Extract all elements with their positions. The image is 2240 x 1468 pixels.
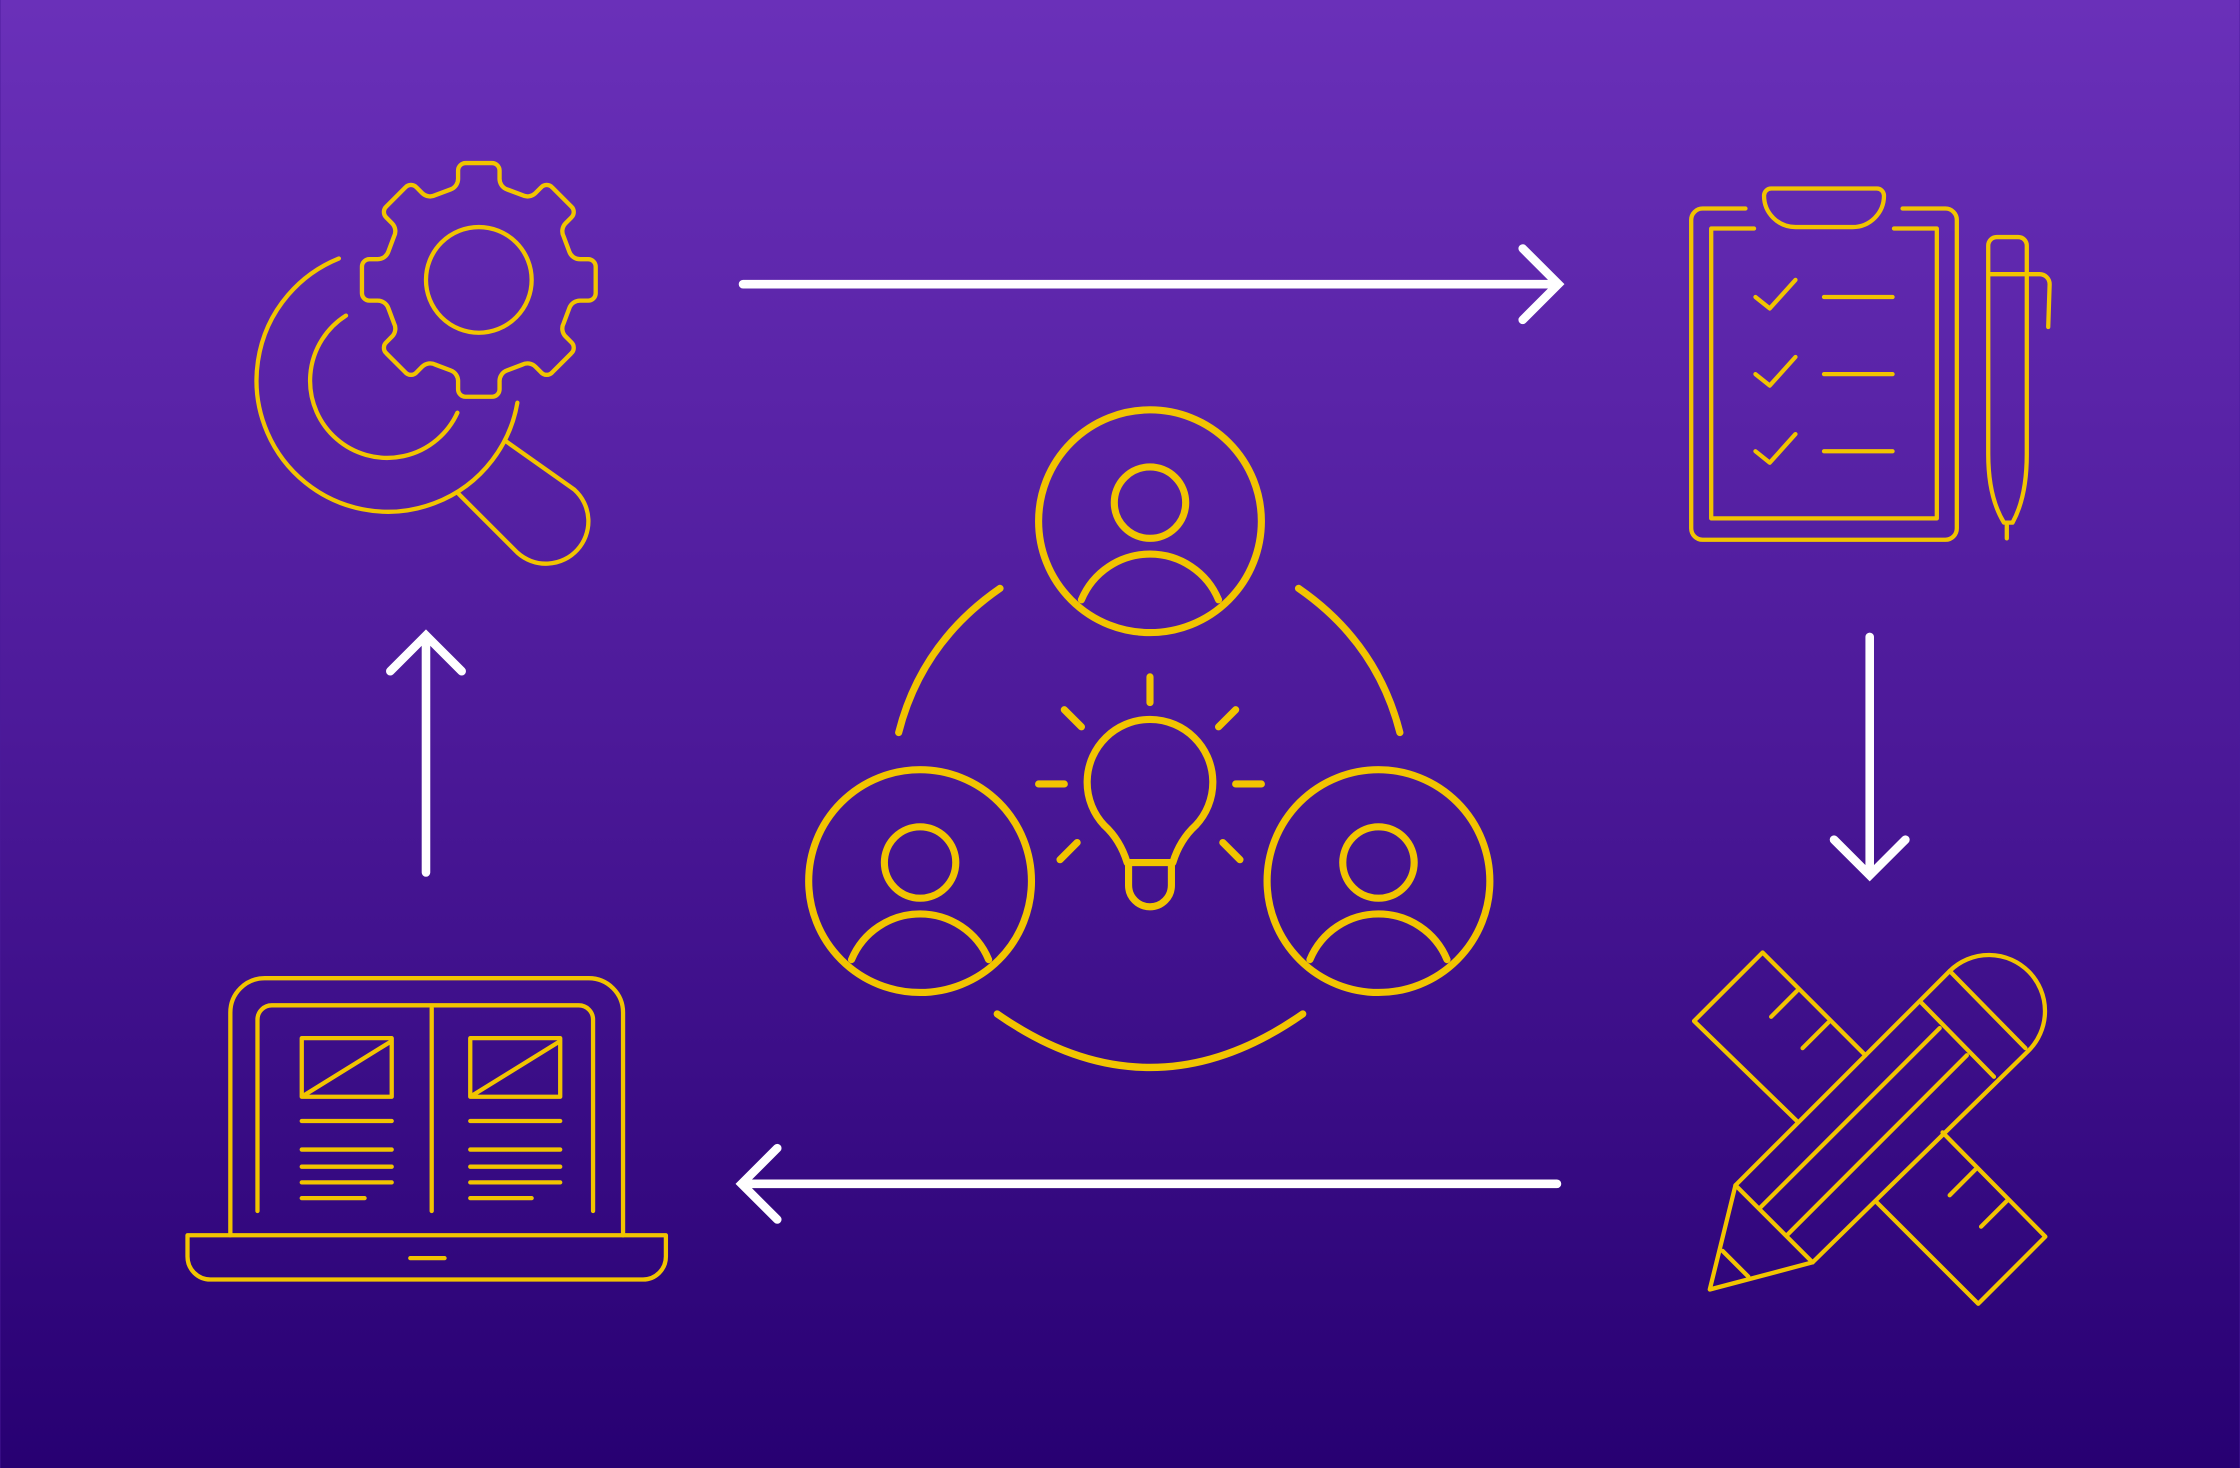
arrow: bottom left [742,1148,1557,1220]
person top [1039,410,1261,633]
center: team collaboration idea [809,410,1490,1067]
person left [809,770,1031,992]
icon: pencil and ruler [1694,952,2045,1304]
icon: clipboard with pen [1691,188,2050,540]
icon: laptop [188,978,666,1280]
arrow: left up [390,635,462,873]
arrow: top right [743,248,1558,320]
icon: research magnifier with gear [257,163,596,564]
light bulb [1039,677,1261,907]
arrow: right down [1834,637,1905,875]
person right [1267,770,1490,992]
